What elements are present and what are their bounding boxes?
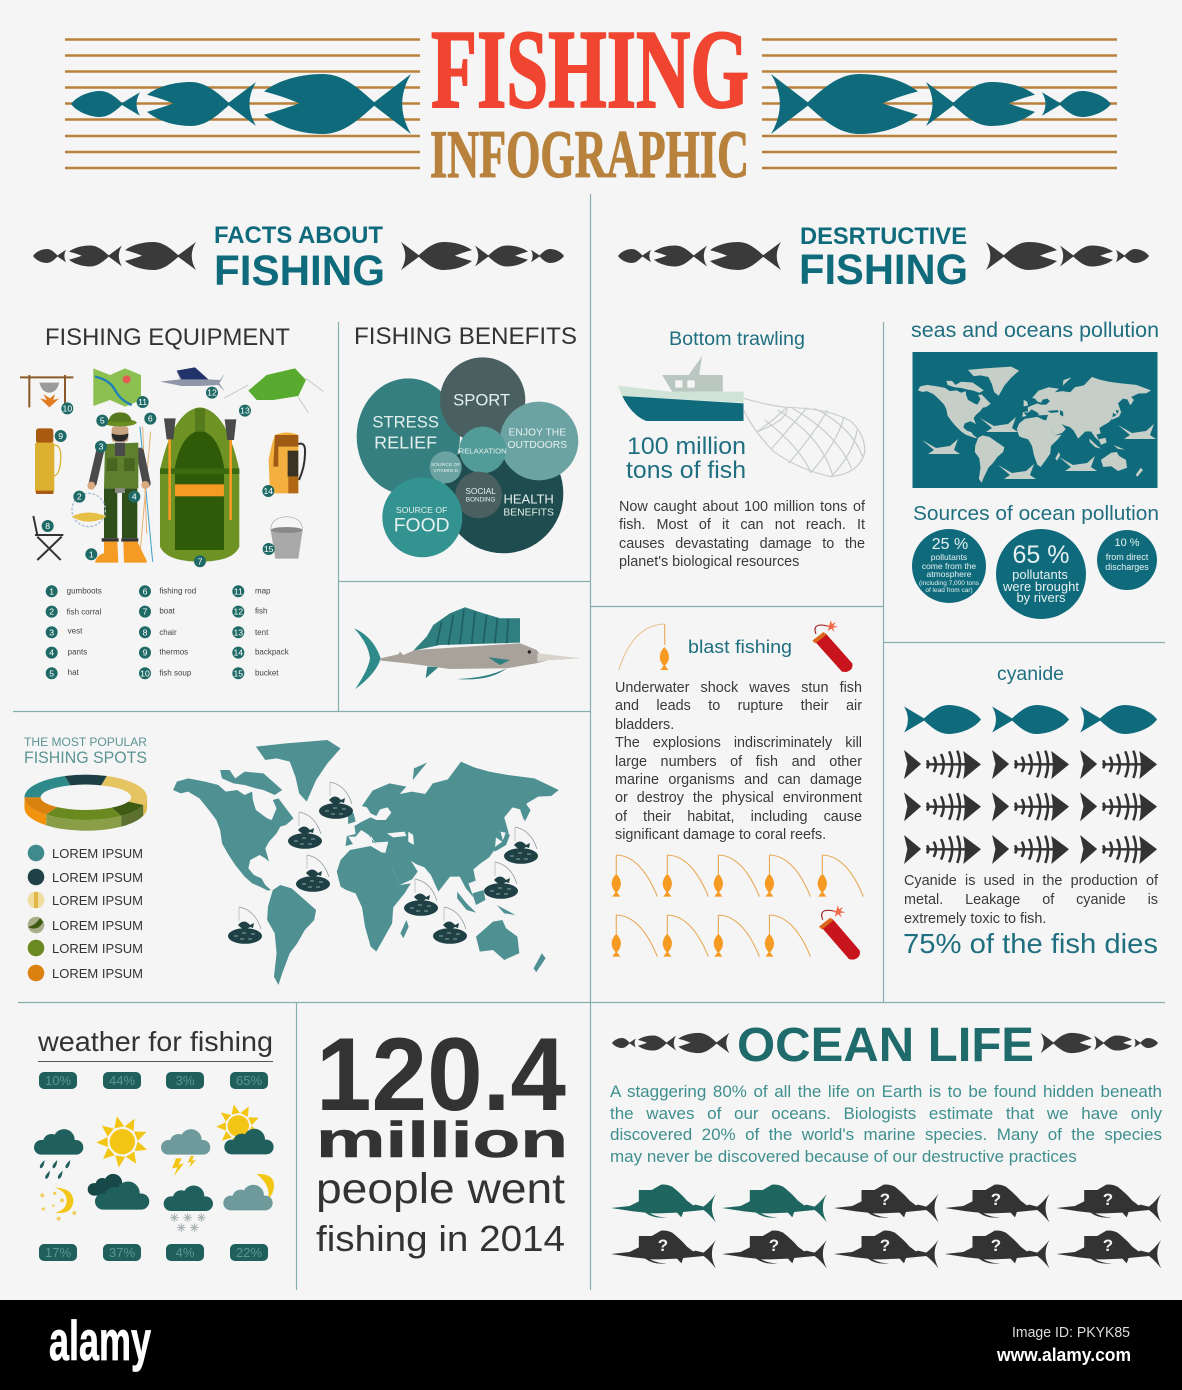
stat bubble: 25 percent: atmosphere [927, 569, 972, 579]
text block: ocean life [610, 1082, 1162, 1166]
stat bubble: 10 percent: from direct [1106, 552, 1149, 562]
equipment legend: backpack [255, 647, 289, 656]
equipment legend: pants [68, 647, 87, 656]
title: INFOGRAPHIC [430, 116, 749, 192]
text block: cyanide: metal. Leakage of cyanide is [904, 892, 1158, 908]
text block: cyanide: Cyanide is used in the production of [904, 873, 1158, 889]
benefits bubbles: SOCIAL [465, 486, 496, 496]
percent pills bottom [39, 1244, 268, 1261]
equipment number badges: 1 [89, 549, 94, 559]
benefits bubbles: STRESS [372, 412, 439, 431]
marlin pictogram: ? [1103, 1236, 1113, 1255]
title: FISHING [431, 8, 749, 132]
footer bar [0, 1300, 1182, 1390]
equipment number badges: 3 [99, 442, 104, 452]
equipment legend: fish [255, 606, 267, 615]
ring chart legend [28, 845, 143, 981]
header stripes and fish [65, 40, 1117, 168]
percent pills bottom: 37% [109, 1245, 135, 1260]
equipment number badges: 15 [264, 544, 274, 554]
benefits bubbles: FOOD [394, 515, 450, 536]
divider lines [13, 194, 1165, 1290]
marlin pictogram: ? [991, 1190, 1001, 1209]
panel: ocean pollution [911, 319, 1159, 619]
panel: cyanide [903, 664, 1158, 959]
text block: cyanide [904, 873, 1158, 927]
heading: fishing equipment: FISHING EQUIPMENT [45, 324, 290, 351]
percent pills top [39, 1072, 268, 1089]
equipment legend: 4 [49, 648, 54, 658]
equipment legend: boat [159, 606, 176, 615]
ring chart legend: LOREM IPSUM [52, 893, 143, 908]
heading: fishing benefits: FISHING BENEFITS [354, 323, 577, 350]
heading: ocean life: OCEAN LIFE [737, 1019, 1034, 1072]
ring chart legend: LOREM IPSUM [52, 941, 143, 956]
equipment legend: vest [68, 627, 83, 636]
equipment legend: 6 [143, 586, 148, 596]
percent pills bottom: 4% [176, 1245, 195, 1260]
text block: trawling: Now caught about 100 million tons of [619, 499, 865, 515]
footer bar: www.alamy.com [996, 1345, 1131, 1365]
footer bar: alamy [49, 1309, 151, 1372]
panel: fishing benefits [354, 323, 578, 557]
equipment legend: fish soup [159, 668, 192, 677]
text block: blast fishing: significant damage to coral reefs. [615, 827, 826, 843]
equipment legend: gumboots [67, 587, 102, 596]
heading: fishing spots [24, 735, 147, 767]
benefits bubbles: OUTDOORS [507, 440, 567, 451]
stat bubble: 65 percent: were brought [1002, 579, 1079, 594]
stat: 120.4 million people: fishing in 2014 [316, 1218, 565, 1259]
benefits bubbles: SPORT [453, 391, 510, 410]
icon: trawler and net [618, 356, 865, 477]
equipment legend: 1 [49, 586, 54, 596]
panel: weather for fishing [34, 1026, 274, 1261]
percent pills bottom: 22% [236, 1245, 262, 1260]
marlin pictogram: ? [880, 1236, 890, 1255]
heading: blast fishing: blast fishing [688, 637, 792, 657]
equipment legend: 3 [49, 627, 54, 637]
equipment legend [46, 585, 289, 679]
3d ring chart [24, 775, 147, 831]
stat: 100 million tons: 100 million [627, 433, 746, 460]
stat bubble: 25 percent: pollutants [931, 552, 967, 562]
equipment number badges: 8 [45, 521, 50, 531]
panel: fishing equipment [20, 324, 323, 679]
equipment legend: 11 [234, 586, 243, 596]
stat bubble: 65 percent: by rivers [1016, 590, 1066, 605]
heading: fishing spots: THE MOST POPULAR [24, 735, 147, 749]
benefits bubbles: VITAMIN D [433, 468, 458, 474]
fish and skeleton pictogram [904, 705, 1157, 864]
text block: ocean life: A staggering 80% of all the life on Earth is to be found hidden beneath [610, 1082, 1162, 1101]
equipment legend: chair [159, 628, 177, 637]
equipment number badges: 2 [77, 492, 82, 502]
text block: ocean life: discovered 20% of the world's marine species. Many of the species [610, 1125, 1162, 1144]
equipment number badges: 5 [100, 416, 105, 426]
text block: blast fishing: of their habitat, including cause [615, 809, 862, 825]
benefits bubbles: BENEFITS [503, 508, 554, 519]
heading: cyanide: cyanide [997, 664, 1064, 685]
text block: blast fishing: Underwater shock waves stun fish [615, 680, 862, 696]
marlin pictogram: ? [991, 1236, 1001, 1255]
marlin pictogram: ? [658, 1236, 668, 1255]
percent pills top: 65% [236, 1073, 262, 1088]
equipment number badges [42, 387, 275, 567]
stat bubble: 25 percent [912, 529, 986, 603]
benefits bubbles: SOURCE OF [396, 505, 447, 515]
heading: destructive fishing: FISHING [799, 246, 968, 294]
heading: destructive fishing: DESRTUCTIVE [800, 223, 967, 250]
equipment number badges: 10 [63, 403, 72, 413]
equipment legend: thermos [159, 647, 188, 656]
marlin pictogram: ? [880, 1190, 890, 1209]
benefits bubbles: RELIEF [374, 433, 437, 453]
equipment number badges: 7 [198, 556, 203, 566]
equipment legend: bucket [255, 668, 279, 677]
heading: facts about fishing: FISHING [214, 247, 385, 295]
text block: trawling [619, 499, 866, 570]
heading: facts about fishing: FACTS ABOUT [214, 222, 383, 249]
stat bubble: 25 percent: 25 % [932, 536, 968, 553]
equipment legend: 9 [143, 648, 148, 658]
panel: ocean life [611, 1019, 1161, 1268]
title [430, 8, 749, 192]
text block: trawling: causes devastating damage to the [619, 536, 865, 552]
stat: 100 million tons [626, 433, 746, 484]
equipment number badges: 6 [148, 414, 153, 424]
heading: fishing spots: FISHING SPOTS [24, 748, 147, 767]
heading: weather: weather for fishing [37, 1026, 273, 1057]
benefits bubbles: RELAXATION [459, 447, 507, 456]
text block: blast fishing [615, 680, 862, 843]
text block: blast fishing: bladders. [615, 717, 674, 733]
stat bubble: 65 percent [996, 529, 1086, 619]
heading: facts about fishing [33, 222, 564, 295]
equipment legend: 5 [49, 668, 54, 678]
stat bubble: 25 percent: of lead from car) [925, 587, 973, 594]
pollution world map [912, 352, 1158, 488]
text block: trawling: planet's biological resources [619, 554, 799, 570]
benefits bubbles: BONDING [466, 497, 495, 504]
equipment legend: map [255, 587, 271, 596]
heading: sources of ocean pollution: Sources of ocean pollution [913, 502, 1159, 525]
percent pills top: 44% [109, 1073, 135, 1088]
ring chart legend: LOREM IPSUM [52, 870, 143, 885]
stat bubble: 25 percent: (including 7,000 tons [919, 580, 980, 587]
equipment legend: 8 [143, 627, 148, 637]
stat: 100 million tons: tons of fish [626, 457, 746, 484]
ring chart legend: LOREM IPSUM [52, 918, 143, 933]
benefits bubbles [357, 357, 578, 557]
icons: rods and dynamite [612, 620, 863, 960]
marlin pictogram: ? [1103, 1190, 1113, 1209]
marlin pictogram: ? [769, 1236, 779, 1255]
benefits bubbles: SOURCE OF [431, 462, 460, 468]
panel: most popular fishing spots [24, 735, 559, 985]
equipment number badges: 11 [138, 397, 147, 407]
world map [173, 740, 559, 985]
illustration: sailfish [354, 607, 580, 689]
text block: blast fishing: large numbers of fish and other [615, 754, 862, 770]
equipment illustrations [20, 367, 323, 563]
footer bar: Image ID: PKYK85 [1012, 1324, 1130, 1341]
equipment legend: tent [255, 628, 269, 637]
text block: trawling: fish. Most of it can not reach. It [619, 517, 865, 533]
stat bubble: 10 percent: discharges [1105, 562, 1149, 572]
stat: 120.4 million people: people went [316, 1165, 565, 1213]
fishing spot markers [228, 782, 538, 944]
equipment number badges: 12 [207, 388, 217, 398]
ring chart legend: LOREM IPSUM [52, 846, 143, 861]
text block: ocean life: the waves of our oceans. Biologists estimate that we have only [610, 1104, 1162, 1123]
equipment legend: 2 [49, 607, 54, 617]
stat bubble: 10 percent [1097, 530, 1157, 590]
text block: ocean life: may never be discovered because of our destructive practices [610, 1147, 1077, 1166]
stat: 75 percent: 75% of the fish dies [903, 928, 1158, 959]
ring chart legend: LOREM IPSUM [52, 966, 143, 981]
equipment number badges: 9 [58, 431, 63, 441]
equipment legend: 12 [233, 607, 243, 617]
equipment legend: fish corral [67, 607, 101, 616]
weather icons [34, 1103, 274, 1232]
equipment legend: 10 [140, 668, 150, 678]
stat: 120.4 million people: 120.4 [316, 1017, 566, 1133]
equipment number badges: 4 [132, 492, 137, 502]
percent pills top: 10% [45, 1073, 71, 1088]
panel: bottom trawling [618, 329, 865, 484]
heading: destructive fishing [618, 223, 1149, 294]
text block: blast fishing: and leads to rupture their air [615, 698, 862, 714]
stat bubble: 65 percent: 65 % [1013, 541, 1069, 569]
equipment legend: hat [68, 668, 80, 677]
equipment legend: 14 [233, 648, 243, 658]
equipment legend: 7 [143, 607, 148, 617]
equipment legend: fishing rod [159, 587, 196, 596]
equipment legend: 13 [233, 627, 243, 637]
text block: blast fishing: or destroy the physical environment [615, 790, 862, 806]
benefits bubbles: ENJOY THE [509, 428, 566, 439]
marlin pictogram [611, 1185, 1161, 1268]
heading: bottom trawling: Bottom trawling [669, 329, 805, 350]
stat bubble: 65 percent: pollutants [1012, 567, 1068, 582]
heading: seas and oceans pollution: seas and oceans pollution [911, 319, 1159, 342]
percent pills bottom: 17% [45, 1245, 71, 1260]
panel: blast fishing [612, 620, 863, 960]
equipment legend: 15 [233, 668, 243, 678]
stat: 120.4 million people [316, 1017, 568, 1259]
stat: 120.4 million people: million [316, 1112, 568, 1168]
equipment number badges: 13 [240, 406, 250, 416]
equipment number badges: 14 [263, 486, 273, 496]
text block: blast fishing: marine organisms and can damage [615, 772, 862, 788]
stat bubble: 25 percent: come from the [922, 561, 976, 571]
percent pills top: 3% [176, 1073, 195, 1088]
text block: cyanide: extremely toxic to fish. [904, 911, 1046, 927]
stat bubble: 10 percent: 10 % [1114, 537, 1140, 549]
benefits bubbles: HEALTH [504, 492, 554, 507]
text block: blast fishing: The explosions indiscriminately kill [615, 735, 862, 751]
heading: ocean life [612, 1019, 1158, 1072]
